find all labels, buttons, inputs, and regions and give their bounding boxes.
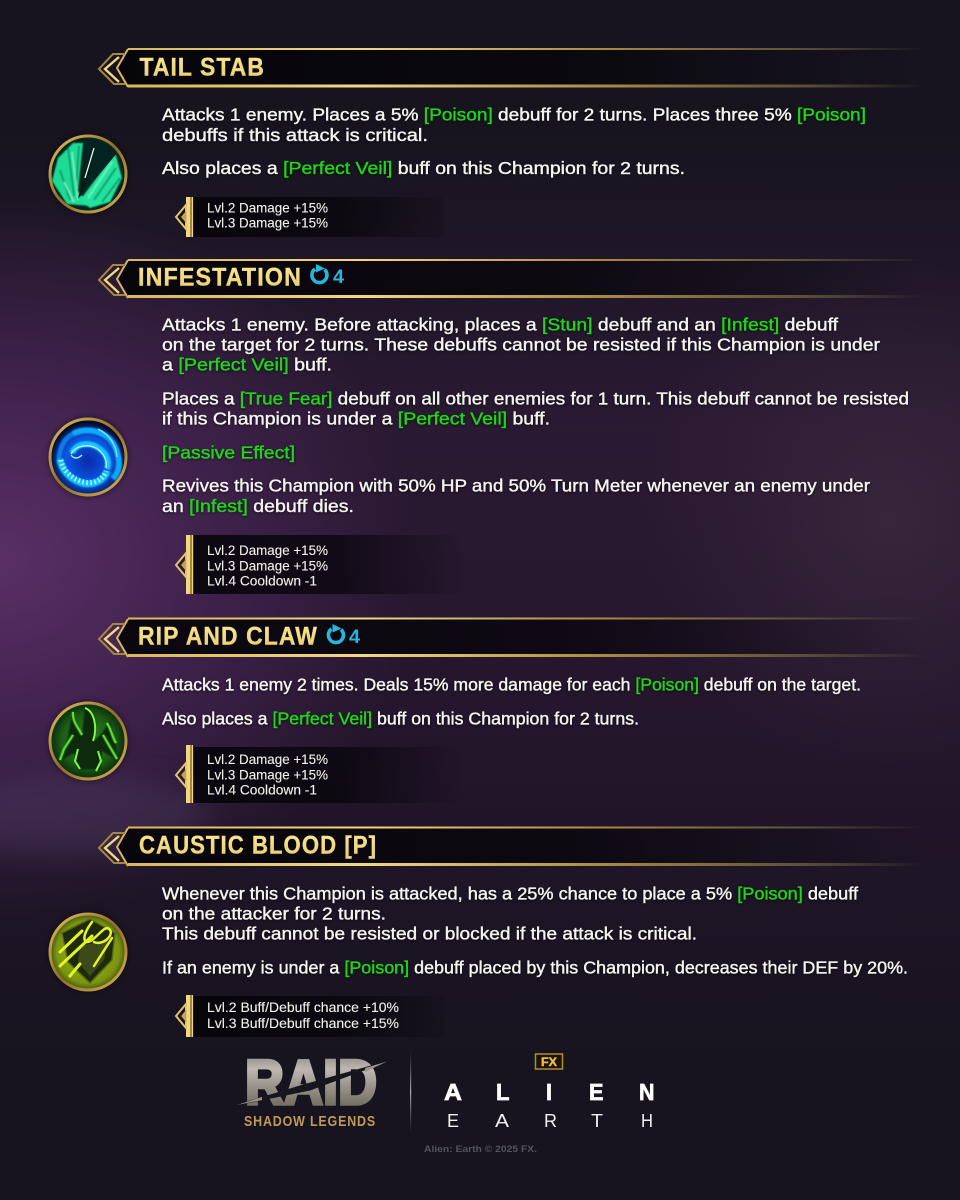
logo: Alien Earth: L — [496, 1079, 510, 1105]
text block: Tail Stab: Also places a [Perfect Veil] buff on this Champion for 2 turns. — [162, 158, 685, 178]
icon: Tail Stab — [48, 134, 128, 214]
text block: Rip and Claw — [162, 674, 861, 728]
text block: Tail Stab: Attacks 1 enemy. Places a 5% [Poison] debuff for 2 turns. Places three 5% [Poison] — [162, 104, 866, 124]
cooldown: Rip and Claw: 4 — [349, 627, 360, 648]
text block: Infestation: a [Perfect Veil] buff. — [162, 354, 332, 374]
logo: Alien Earth: A — [495, 1111, 509, 1131]
level panel: Rip and Claw: Lvl.2 Damage +15% — [207, 752, 328, 767]
level panel: Caustic Blood: Lvl.3 Buff/Debuff chance +15% — [207, 1016, 399, 1031]
cooldown: Infestation — [312, 264, 344, 288]
header: Tail Stab — [99, 49, 925, 87]
logo: Alien Earth: T — [591, 1111, 603, 1131]
level panel: Infestation — [176, 535, 469, 594]
text block: Infestation — [162, 314, 909, 516]
logo: Alien Earth — [444, 1079, 654, 1131]
text block: Caustic Blood — [162, 884, 908, 978]
logo: FX — [536, 1054, 562, 1069]
text block: Tail Stab: debuffs if this attack is critical. — [162, 125, 428, 145]
level panel: Rip and Claw: Lvl.4 Cooldown -1 — [207, 783, 317, 798]
icon: Infestation — [48, 417, 128, 497]
text block: Infestation: Attacks 1 enemy. Before attacking, places a [Stun] debuff and an [Infest] debuff — [162, 314, 838, 334]
logo: Alien Earth: H — [641, 1111, 653, 1131]
level panel: Tail Stab: Lvl.3 Damage +15% — [207, 216, 328, 231]
icon: Rip and Claw — [48, 701, 128, 781]
logo: FX: FX — [541, 1055, 557, 1069]
text block: Infestation: Revives this Champion with 50% HP and 50% Turn Meter whenever an enemy under — [162, 476, 870, 496]
text block: Tail Stab — [162, 104, 866, 178]
copyright: Alien: Earth © 2025 FX. — [424, 1144, 537, 1155]
level panel: Infestation: Lvl.4 Cooldown -1 — [207, 574, 317, 588]
logo: Alien Earth: R — [544, 1111, 557, 1131]
text block: Caustic Blood: If an enemy is under a [Poison] debuff placed by this Champion, decreases their DEF by 20%. — [162, 958, 908, 978]
level panel: Infestation: Lvl.2 Damage +15% — [207, 543, 328, 558]
text block: Rip and Claw: Attacks 1 enemy 2 times. Deals 15% more damage for each [Poison] debuff on the target. — [162, 674, 861, 694]
logo: RAID Shadow Legends: RAID — [245, 1048, 377, 1118]
text block: Rip and Claw: Also places a [Perfect Veil] buff on this Champion for 2 turns. — [162, 708, 639, 728]
text block: Infestation: if this Champion is under a [Perfect Veil] buff. — [162, 408, 550, 428]
header: Caustic Blood — [99, 828, 925, 866]
title: Tail Stab: TAIL STAB — [140, 54, 265, 82]
level panel: Tail Stab — [176, 197, 444, 237]
text block: Infestation: on the target for 2 turns. These debuffs cannot be resisted if this Champion is under — [162, 334, 880, 354]
text block: Infestation: an [Infest] debuff dies. — [162, 496, 354, 516]
text block: Caustic Blood: Whenever this Champion is attacked, has a 25% chance to place a 5% [Poison] debuff — [162, 884, 858, 904]
icon: Caustic Blood — [48, 912, 128, 992]
header: Rip and Claw — [99, 618, 925, 657]
text block: Infestation: Places a [True Fear] debuff on all other enemies for 1 turn. This debuff cannot be resisted — [162, 388, 909, 408]
level panel: Caustic Blood: Lvl.2 Buff/Debuff chance +10% — [207, 1000, 399, 1015]
logo: RAID Shadow Legends: SHADOW LEGENDS — [244, 1113, 376, 1130]
logo: Alien Earth: N — [639, 1079, 654, 1105]
divider — [410, 1052, 411, 1132]
text block: Caustic Blood: on the attacker for 2 turns. — [162, 904, 386, 924]
level panel: Rip and Claw: Lvl.3 Damage +15% — [207, 768, 328, 782]
text block: Caustic Blood: This debuff cannot be resisted or blocked if the attack is critical. — [162, 924, 697, 944]
text block: Infestation: [Passive Effect] — [162, 442, 295, 462]
title: Rip and Claw: RIP AND CLAW — [138, 622, 318, 650]
level panel: Tail Stab: Lvl.2 Damage +15% — [207, 200, 328, 216]
logo: Alien Earth: I — [546, 1079, 552, 1105]
cooldown: Infestation: 4 — [333, 267, 344, 288]
level panel: Rip and Claw — [176, 745, 469, 803]
title: Caustic Blood: CAUSTIC BLOOD [P] — [139, 832, 377, 860]
header: Infestation — [99, 260, 925, 298]
logo: Alien Earth: E — [589, 1079, 604, 1105]
logo: Alien Earth: E — [447, 1111, 459, 1131]
logo: Alien Earth: A — [444, 1079, 462, 1105]
cooldown: Rip and Claw — [328, 624, 360, 648]
level panel: Infestation: Lvl.3 Damage +15% — [207, 558, 328, 574]
level panel: Caustic Blood — [176, 995, 444, 1037]
title: Infestation: INFESTATION — [138, 264, 302, 292]
